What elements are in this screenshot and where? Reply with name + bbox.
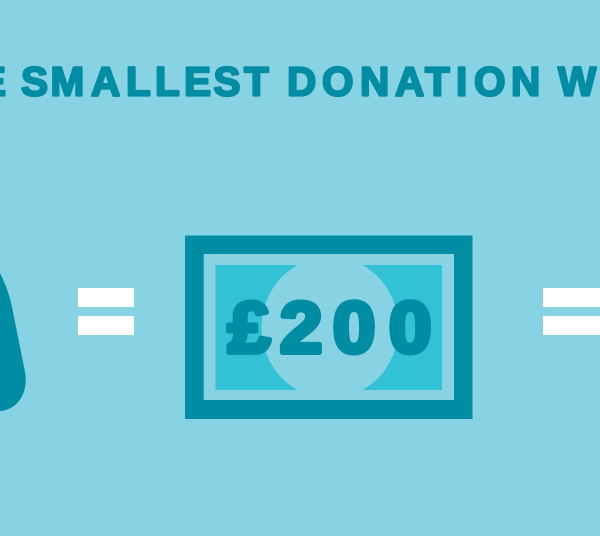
equals sign: right	[543, 288, 600, 335]
equals sign: left	[78, 288, 134, 335]
icon: money bag (cropped)	[0, 273, 26, 411]
banknote inner border	[204, 254, 454, 400]
banknote value: £200	[228, 287, 431, 368]
banknote: £200	[185, 236, 472, 419]
banknote frame	[185, 236, 472, 419]
banknote centre circle	[262, 256, 398, 398]
banknote teal field	[216, 265, 442, 390]
